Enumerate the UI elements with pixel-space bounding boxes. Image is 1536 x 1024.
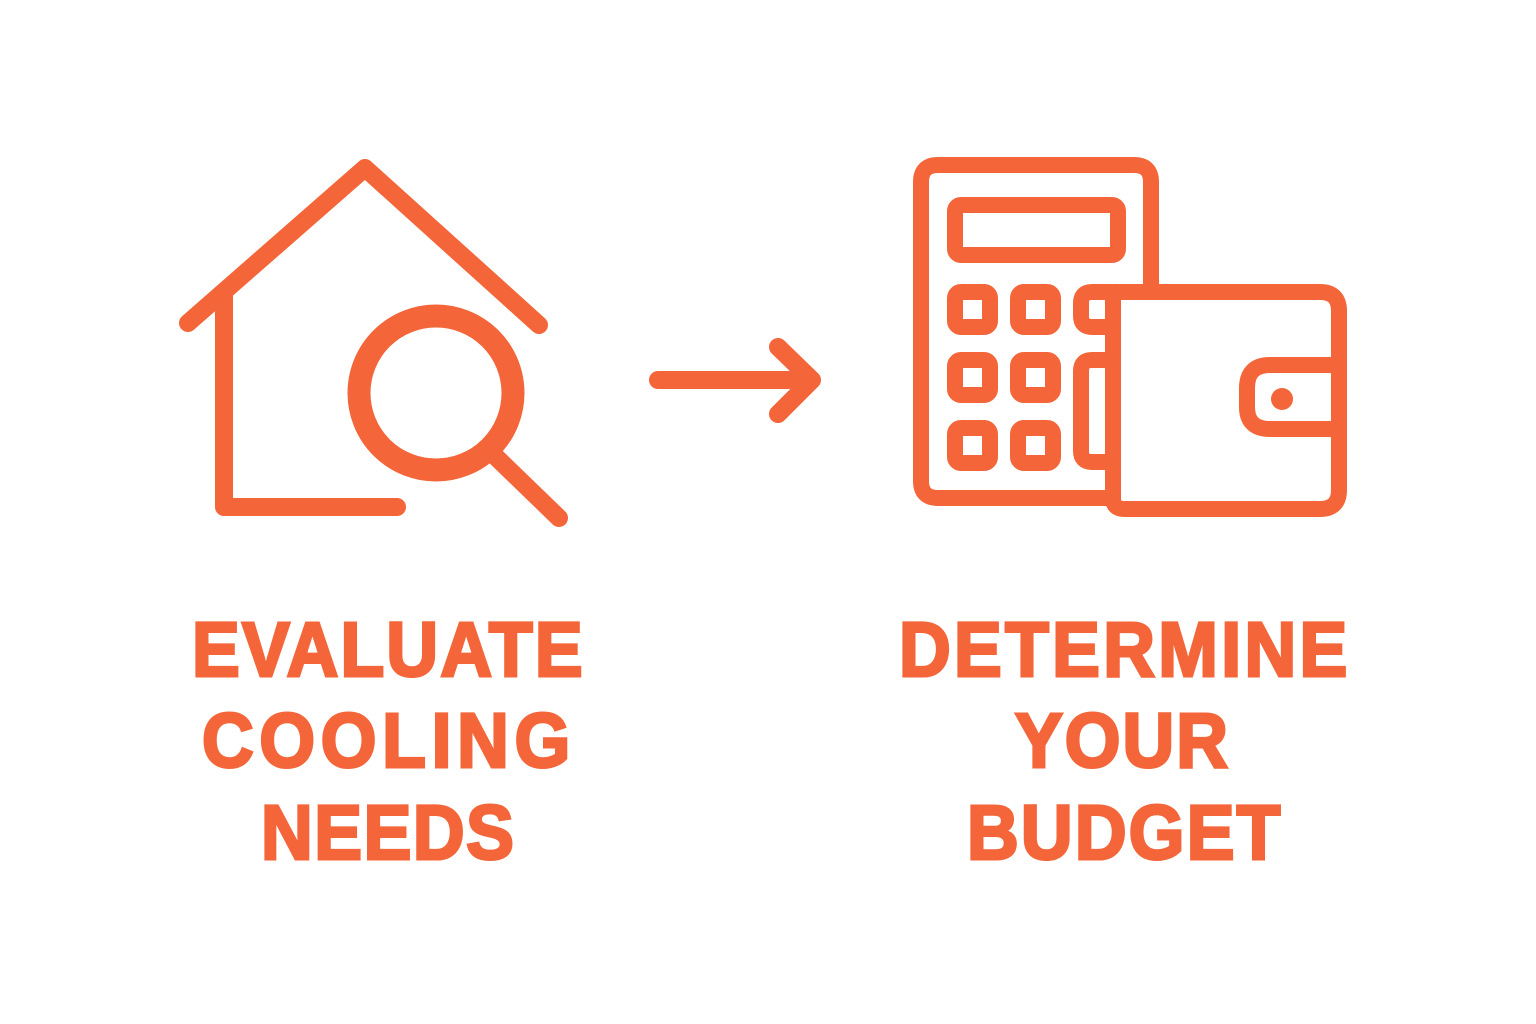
calculator keys [955,292,1112,463]
calculator body [921,165,1151,498]
heading: evaluate cooling needs: COOLING [202,698,570,784]
heading: determine your budget: BUDGET [967,790,1280,876]
arrow [658,347,812,414]
magnifying glass lens [359,316,513,470]
wallet body [1113,292,1339,509]
icon: calculator and wallet [921,165,1339,509]
calculator display [955,205,1118,255]
wallet clasp [1247,365,1339,429]
heading: determine your budget: YOUR [1015,698,1228,784]
heading: determine your budget [899,607,1347,876]
magnifying glass handle [495,456,559,518]
house left wall [215,295,233,507]
wallet button [1271,388,1293,410]
heading: evaluate cooling needs: EVALUATE [192,607,583,693]
icon: house with magnifying glass [188,168,559,518]
heading: evaluate cooling needs: NEEDS [261,790,514,876]
heading: evaluate cooling needs [192,607,583,876]
house floor [224,498,397,516]
heading: determine your budget: DETERMINE [899,607,1347,693]
house roof [188,168,539,325]
